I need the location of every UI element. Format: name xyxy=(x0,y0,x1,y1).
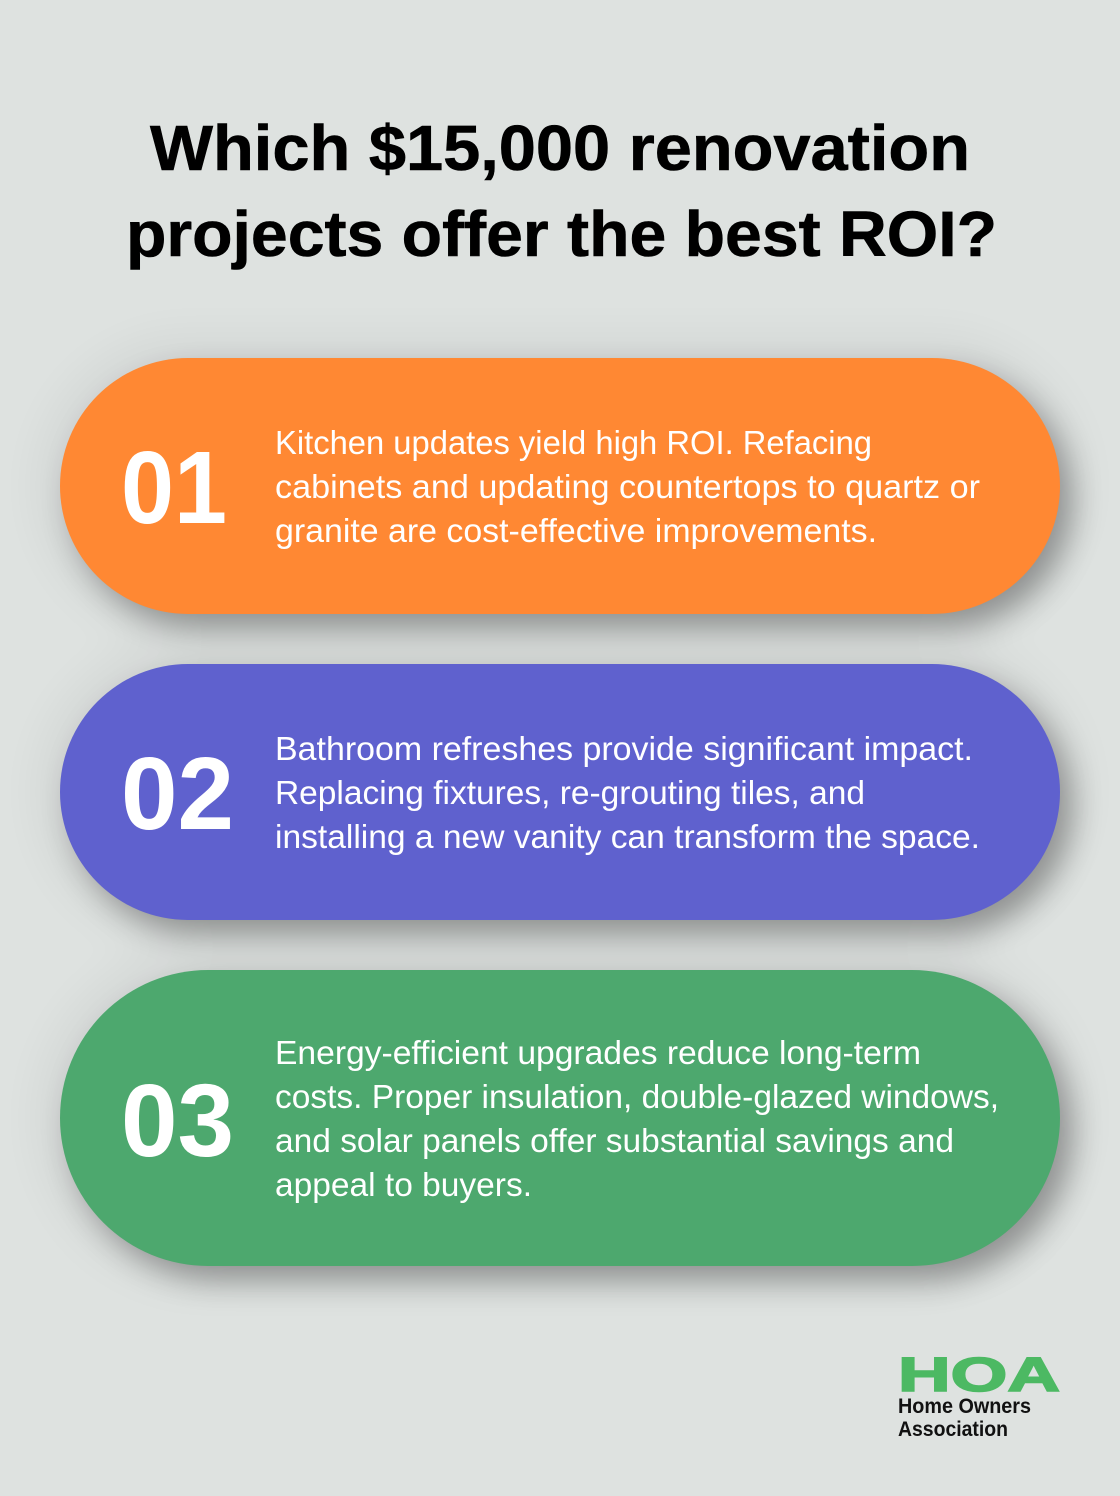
description text: and solar panels offer substantial savings and xyxy=(275,1122,954,1159)
description text: cabinets and updating countertops to quartz or xyxy=(275,468,980,505)
description text: Energy-efficient upgrades reduce long-term xyxy=(275,1034,921,1071)
green pill background xyxy=(60,970,1060,1266)
description text: Kitchen updates yield high ROI. Refacing xyxy=(275,424,872,461)
logo mark HOA: HOA xyxy=(898,1349,1060,1402)
description text: installing a new vanity can transform the space. xyxy=(275,818,980,855)
title: projects offer the best ROI? xyxy=(126,198,997,270)
panel: step 02 bathroom refreshes xyxy=(60,664,1060,920)
logo name xyxy=(898,1395,1031,1441)
panel: step 03 energy-efficient upgrades xyxy=(60,970,1060,1266)
logo name: Home Owners xyxy=(898,1395,1031,1418)
logo name: Association xyxy=(898,1418,1008,1441)
description text: Bathroom refreshes provide significant impact. xyxy=(275,730,973,767)
description text: appeal to buyers. xyxy=(275,1166,532,1203)
panel: step 01 kitchen updates xyxy=(60,358,1060,614)
title xyxy=(126,112,997,270)
description text xyxy=(275,424,980,549)
number 03: 03 xyxy=(121,1063,234,1178)
description text: Replacing fixtures, re-grouting tiles, and xyxy=(275,774,865,811)
description text xyxy=(275,1034,999,1203)
logo: HOA Home Owners Association xyxy=(898,1349,1060,1441)
orange pill background xyxy=(60,358,1060,614)
number 02: 02 xyxy=(121,736,234,851)
purple pill background xyxy=(60,664,1060,920)
number 01: 01 xyxy=(121,430,227,545)
description text: costs. Proper insulation, double-glazed windows, xyxy=(275,1078,999,1115)
description text xyxy=(275,730,980,855)
description text: granite are cost-effective improvements. xyxy=(275,512,877,549)
title: Which $15,000 renovation xyxy=(150,112,970,184)
